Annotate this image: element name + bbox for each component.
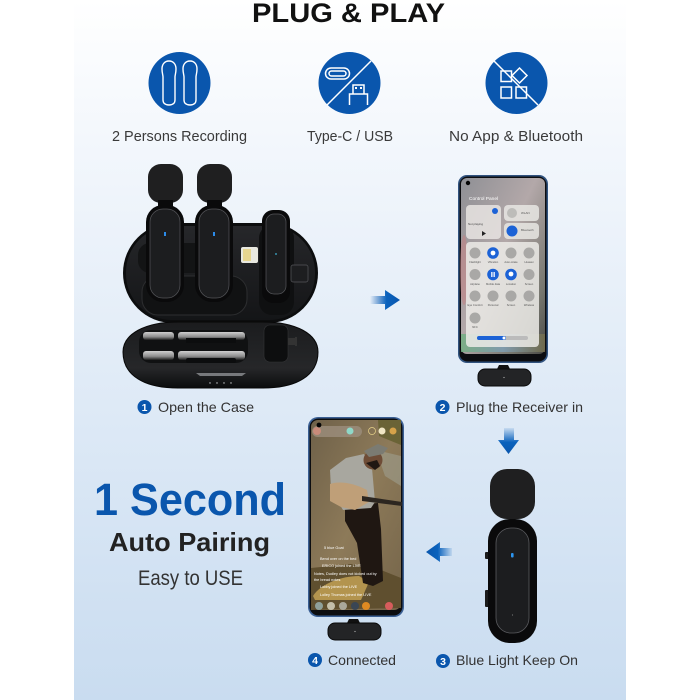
step 4 label: 4 xyxy=(312,655,318,667)
live comments: Lobby joined the LIVE xyxy=(320,585,358,589)
arrow: down xyxy=(498,428,519,454)
step 1 label: Open the Case xyxy=(158,399,254,415)
icon: type-c and usb xyxy=(318,52,380,114)
mic hole xyxy=(512,614,513,616)
toggles card: Personal xyxy=(488,303,499,307)
media card: Not playing xyxy=(468,222,483,226)
receiver plugged in phone 1 xyxy=(478,365,531,386)
toggles card: Airplane xyxy=(470,282,480,286)
label: Type-C / USB xyxy=(307,128,393,145)
arrow: right xyxy=(370,290,400,310)
camera xyxy=(466,181,470,185)
phone with live video xyxy=(308,417,404,617)
headline: 1 second auto pairing: 1 Second xyxy=(94,474,286,525)
toggles card: Location xyxy=(506,282,517,286)
live comments: Lolley Thomas joined the LIVE xyxy=(320,593,372,597)
toggles card xyxy=(466,242,539,347)
live comments: Notes, Dudley does not kicked out by xyxy=(314,572,377,576)
receiver plugged in phone 2 xyxy=(328,619,381,640)
screen wallpaper xyxy=(460,178,545,354)
toggles card: Auto-rotate xyxy=(504,260,518,264)
phone frame xyxy=(458,175,548,363)
case lid xyxy=(123,223,318,323)
control panel heading: Control Panel xyxy=(469,196,498,202)
step 2 label: Plug the Receiver in xyxy=(456,399,583,415)
phone with control panel xyxy=(458,175,548,363)
toggles card: Mobile data xyxy=(486,282,500,286)
toggles card: NFC xyxy=(472,325,478,329)
body xyxy=(488,519,537,643)
step 2 label: 2 xyxy=(440,402,446,414)
background panel xyxy=(74,0,626,700)
side buttons xyxy=(485,552,489,607)
icon: two microphones xyxy=(148,52,210,114)
type-c connector xyxy=(291,265,308,282)
feature: 2 persons recording xyxy=(112,52,247,145)
live video photo xyxy=(311,420,402,610)
bluetooth card xyxy=(504,223,539,239)
feature: type-c / usb xyxy=(307,52,393,145)
live comments: the bread notes xyxy=(314,578,340,582)
receiver xyxy=(262,210,290,303)
charging case with microphones xyxy=(123,164,318,388)
toggles card: Wireless xyxy=(524,303,535,307)
live comments: ERICO joined the LIVE xyxy=(322,564,361,568)
live comments xyxy=(314,546,377,597)
phone frame xyxy=(308,417,404,617)
headline: 1 second auto pairing: Auto Pairing xyxy=(109,527,270,557)
wlan card xyxy=(504,205,539,221)
headline: 1 second auto pairing: Easy to USE xyxy=(138,567,243,590)
step 3 label: 3 xyxy=(440,656,446,668)
toggles card: Flashlight xyxy=(469,260,481,264)
live comments: Bend over on the bed xyxy=(320,557,356,561)
label: No App & Bluetooth xyxy=(449,128,583,145)
step 3 label: Blue Light Keep On xyxy=(456,652,578,668)
headline: 1 second auto pairing xyxy=(94,474,286,590)
camera xyxy=(317,423,321,427)
feature: no app and bluetooth xyxy=(449,52,583,145)
lightning connector xyxy=(241,247,258,263)
front panel xyxy=(496,528,529,633)
bottom icons xyxy=(315,602,393,610)
arrow: left xyxy=(426,542,452,562)
toggles card: Screen xyxy=(507,303,516,307)
microphone 2 xyxy=(195,164,233,302)
label: 2 Persons Recording xyxy=(112,128,247,145)
wlan card: WLAN xyxy=(521,211,530,215)
media card xyxy=(466,205,501,239)
blue led xyxy=(511,553,514,558)
toggles card: Screen xyxy=(525,282,534,286)
microphone 1 xyxy=(146,164,184,302)
toggles card: Eye Comfort xyxy=(468,303,483,307)
step 4 label: Connected xyxy=(328,652,396,668)
case base xyxy=(123,322,318,388)
toggles card: Huawei xyxy=(525,260,534,264)
live stream top bar xyxy=(312,426,396,437)
step 1 label: 1 xyxy=(142,402,148,414)
foam windscreen xyxy=(490,469,535,519)
live comments: 5 blue Goat xyxy=(324,546,345,550)
icon: crossed-out apps xyxy=(486,52,548,114)
toggles card: Vibration xyxy=(488,260,499,264)
guitarist xyxy=(330,444,402,586)
bluetooth card: Bluetooth xyxy=(521,228,534,232)
large microphone xyxy=(485,469,537,643)
